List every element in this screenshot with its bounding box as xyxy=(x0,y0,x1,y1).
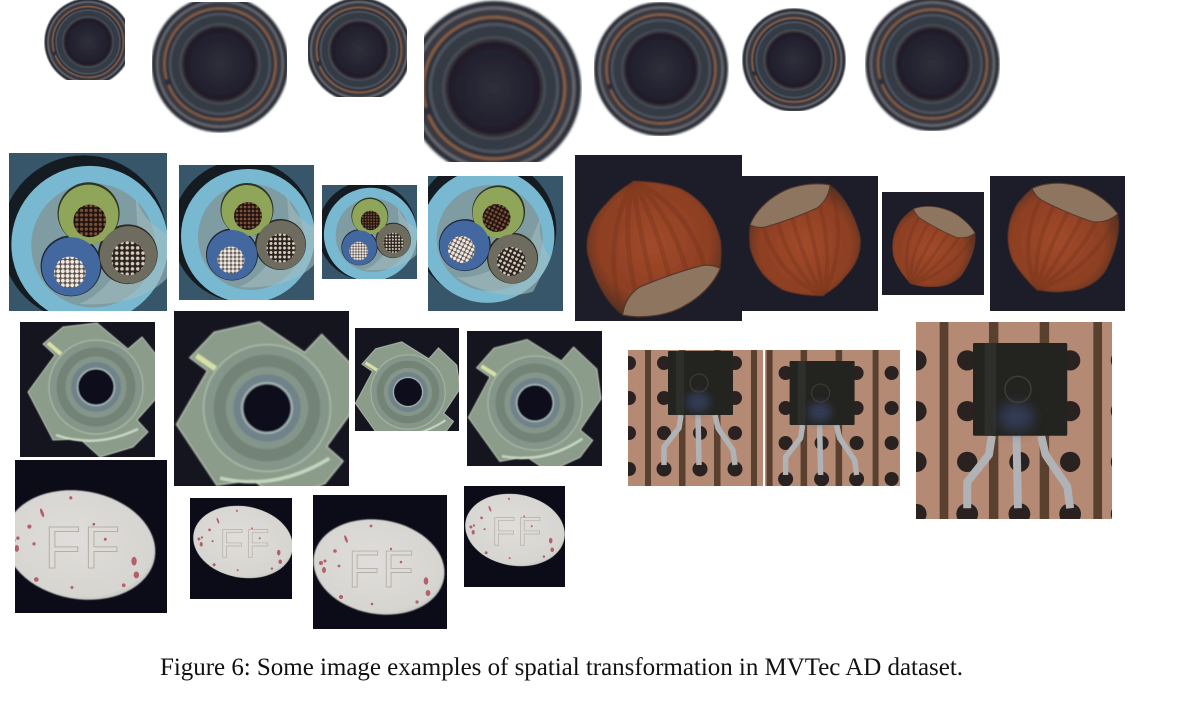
image: bottle 1 xyxy=(44,0,125,80)
image: hazelnut 3 xyxy=(882,192,984,295)
cable examples xyxy=(0,87,632,377)
image: pill 3 xyxy=(313,495,447,629)
image: hazelnut 2 xyxy=(742,176,878,311)
image: cable 3 xyxy=(322,185,417,279)
image: cable 2 xyxy=(179,165,314,300)
image: pill 2 xyxy=(190,498,292,599)
image: metal nut 3 xyxy=(355,328,459,431)
transistor examples xyxy=(588,284,1190,574)
caption: Figure 6: Some image examples of spatial transformation in MVTec AD dataset. xyxy=(160,654,963,681)
image: metal nut 4 xyxy=(467,331,602,466)
image: bottle 2 xyxy=(152,2,287,133)
image: transistor 3 xyxy=(916,322,1112,519)
image: metal nut 2 xyxy=(174,311,349,486)
image: bottle 7 xyxy=(865,0,1000,131)
image: transistor 2 xyxy=(765,350,900,486)
image: cable 4 xyxy=(428,176,563,311)
metal nut examples xyxy=(20,311,610,512)
image: hazelnut 4 xyxy=(990,176,1125,311)
hazelnut examples xyxy=(575,155,1141,321)
image: bottle 6 xyxy=(742,8,846,111)
image: pill 1 xyxy=(15,460,167,613)
image: bottle 3 xyxy=(308,0,407,97)
bottle examples row xyxy=(44,0,999,175)
image: metal nut 1 xyxy=(20,322,155,457)
image: hazelnut 1 xyxy=(575,155,742,321)
image: cable 1 xyxy=(9,153,167,311)
image: pill 4 xyxy=(464,486,565,587)
pill examples xyxy=(0,460,571,629)
image: bottle 4 xyxy=(424,0,582,162)
image: bottle 5 xyxy=(594,2,729,136)
image: transistor 1 xyxy=(628,350,763,486)
